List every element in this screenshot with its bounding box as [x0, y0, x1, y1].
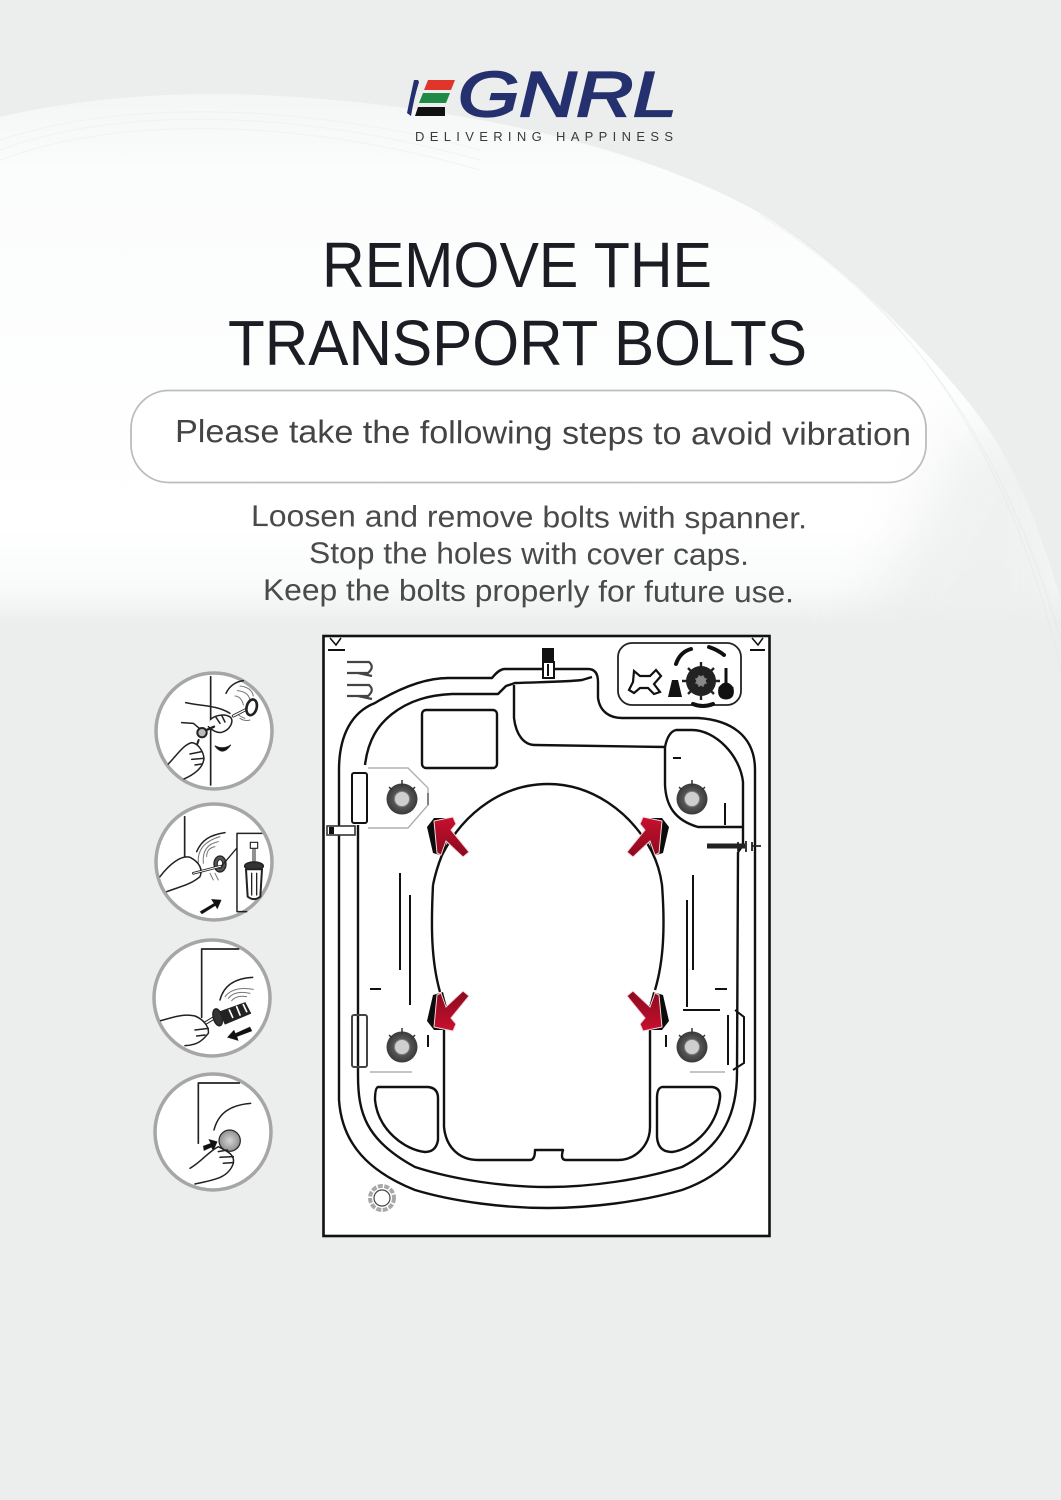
title: [228, 229, 807, 379]
diagram frame: [324, 636, 770, 1236]
cabinet outlines: [339, 669, 755, 1208]
title: TRANSPORT BOLTS: [228, 307, 807, 379]
title: REMOVE THE: [322, 229, 712, 301]
logo: wordmark: GNRL: [458, 60, 677, 130]
latches and small details: [327, 638, 765, 1072]
instructions text: Keep the bolts properly for future use.: [263, 574, 794, 609]
icon: step 2 remove bolt: [156, 804, 272, 920]
callout pill: Please take the following steps to avoid vibration: [175, 413, 911, 452]
right side bolt: [707, 841, 761, 852]
instructions text: Stop the holes with cover caps.: [309, 537, 749, 572]
red arrows: [427, 817, 669, 1031]
icon: step 4 fit cover cap: [155, 1074, 271, 1190]
logo: flag stripes: [407, 80, 455, 116]
icon: step 3 pull spacer out: [154, 940, 270, 1056]
icon: step 1 loosen bolt with spanner: [156, 673, 272, 789]
logo: [407, 60, 677, 144]
instructions text: Loosen and remove bolts with spanner.: [251, 500, 807, 535]
washing machine rear diagram: [324, 636, 770, 1236]
warning emblem: [618, 643, 741, 706]
drain ring: [370, 1186, 394, 1210]
instructions text: [251, 500, 807, 609]
logo: tagline: DELIVERING HAPPINESS: [415, 129, 673, 144]
bolts: [386, 780, 708, 1062]
callout pill: [131, 390, 926, 482]
top centre bolt: [542, 648, 554, 678]
